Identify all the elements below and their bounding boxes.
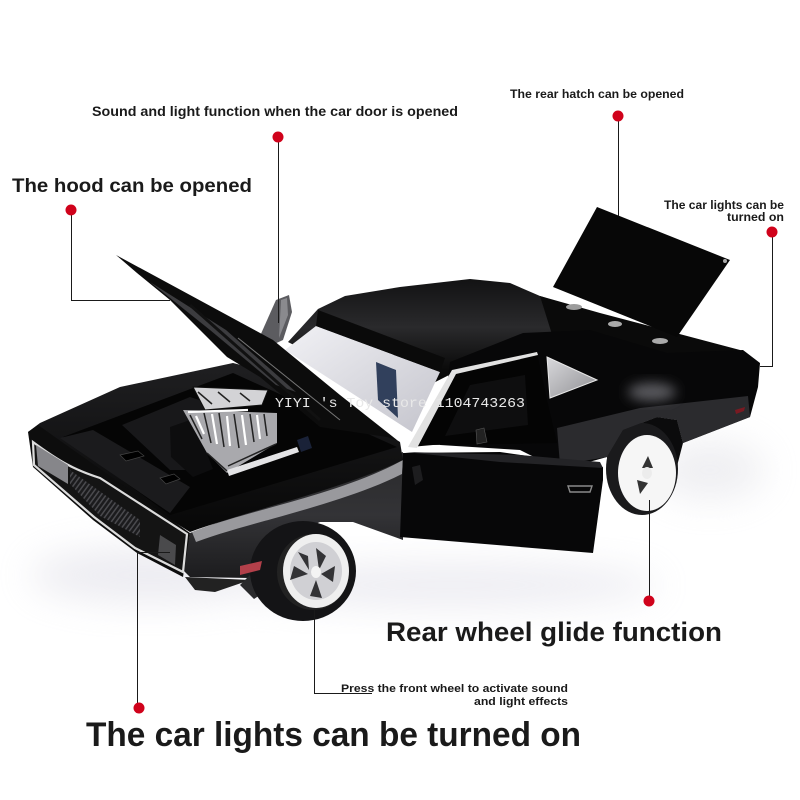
label: rear hatch: The rear hatch can be opened [510, 87, 684, 101]
side window [410, 353, 557, 447]
side marker [240, 561, 262, 575]
marker dots [66, 110, 778, 714]
leader lines [72, 116, 772, 708]
open door [400, 452, 603, 553]
label: rear car lights [664, 200, 784, 224]
windshield [285, 326, 440, 432]
front panel with vents [60, 430, 190, 513]
door behind hood [260, 295, 292, 346]
label: rear car lights: turned on [727, 212, 784, 224]
roof [288, 279, 600, 400]
rear wheel [606, 423, 678, 515]
front bumper and grille [28, 425, 250, 592]
rear body [440, 330, 760, 470]
rear wheel arch interior [607, 417, 683, 480]
door mirror [476, 428, 487, 444]
label: front wheel press: Press the front wheel to activate sound [341, 683, 568, 695]
engine bay [63, 373, 397, 515]
hood raised [116, 255, 397, 440]
fender highlight [192, 460, 403, 542]
bonnet and front deck [28, 363, 403, 532]
car shadow on the ground [30, 440, 765, 607]
label: hood: The hood can be opened [12, 175, 252, 197]
label: front wheel press [341, 683, 568, 708]
label: rear wheel glide: Rear wheel glide function [386, 617, 722, 647]
label: front car lights: The car lights can be turned on [86, 716, 581, 754]
rear deck [540, 296, 760, 380]
front body side [183, 452, 403, 578]
front wheel [240, 521, 356, 621]
engine [170, 387, 312, 477]
rear hatch [553, 207, 730, 337]
watermark: YIYI 's Toy store 1104743263 [275, 396, 525, 412]
label: rear car lights: The car lights can be [664, 200, 784, 212]
seat in cabin [376, 362, 398, 418]
label: front wheel press: and light effects [474, 696, 568, 708]
quarter window [547, 357, 597, 398]
label: door sound and light: Sound and light function when the car door is opened [92, 103, 458, 119]
photo: toy muscle car [28, 207, 760, 621]
